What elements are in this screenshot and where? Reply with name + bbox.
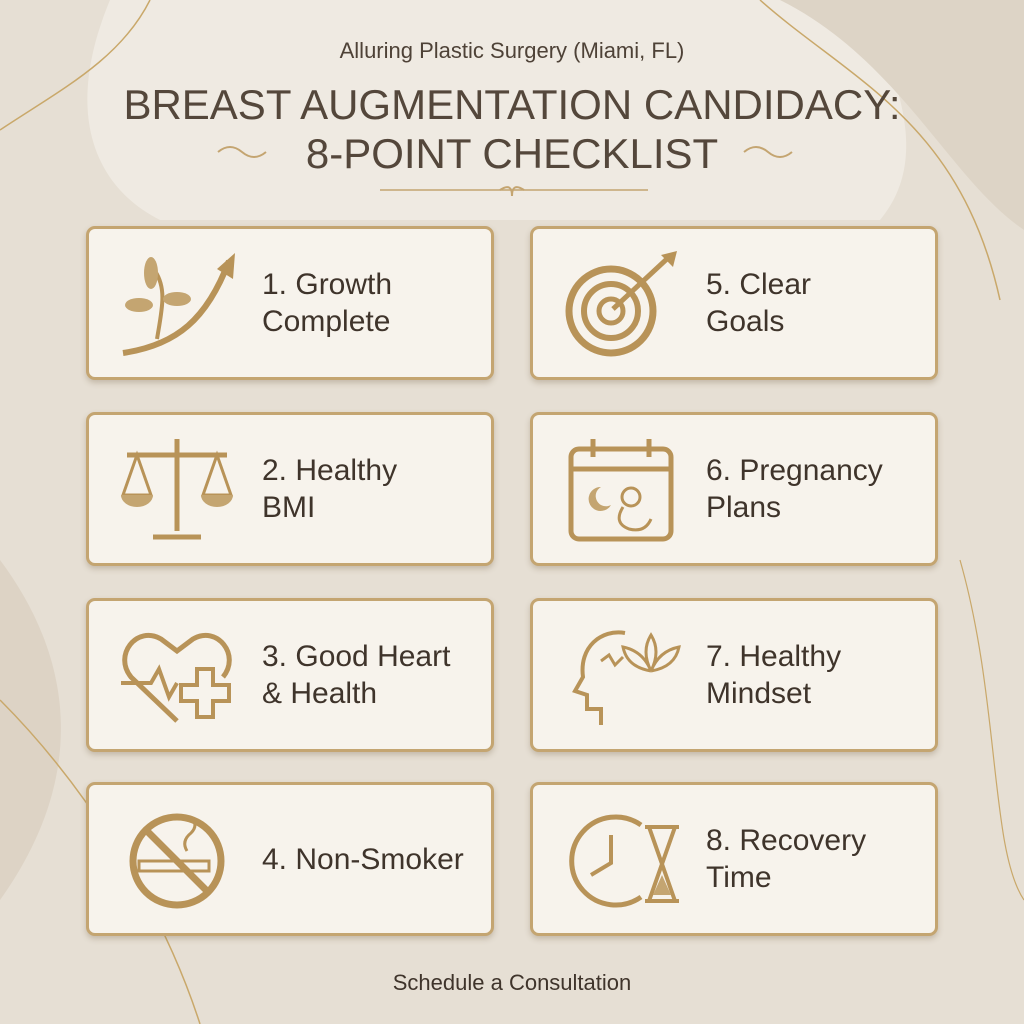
card 1 [86,226,494,380]
icon: head lotus [572,630,681,725]
icon: scale [120,439,233,540]
icon: calendar baby [568,439,674,542]
card 8 [530,782,938,936]
subtitle: Alluring Plastic Surgery (Miami, FL) [340,38,684,63]
ornaments [218,146,792,196]
card 2 [86,412,494,566]
card 6: 6. Pregnancy [706,454,883,487]
title: 8-POINT CHECKLIST [306,130,718,177]
card 2: 2. Healthy [262,454,397,487]
card 7 [530,598,938,752]
card 2: BMI [262,491,315,524]
card 4: 4. Non-Smoker [262,842,464,876]
icon: growth arrow [122,253,235,356]
card 7: 7. Healthy [706,640,841,673]
card 5: Goals [706,305,784,338]
icon: target [566,251,677,356]
card 3: & Health [262,677,377,710]
card 8: 8. Recovery [706,824,866,857]
title: BREAST AUGMENTATION CANDIDACY: [123,81,901,128]
title [123,81,901,177]
card 6: Plans [706,491,781,524]
icon: no smoking [130,814,224,908]
card 5 [530,226,938,380]
card 7: Mindset [706,677,811,710]
card 6 [530,412,938,566]
card 1: 1. Growth [262,268,392,301]
card 3: 3. Good Heart [262,640,450,673]
card 3 [86,598,494,752]
card 4 [86,782,494,936]
footer: Schedule a Consultation [393,970,631,995]
card 8: Time [706,861,772,894]
icon: heart health [121,632,232,723]
icon: clock hourglass [569,814,679,908]
card 1: Complete [262,305,390,338]
card 5: 5. Clear [706,268,811,301]
